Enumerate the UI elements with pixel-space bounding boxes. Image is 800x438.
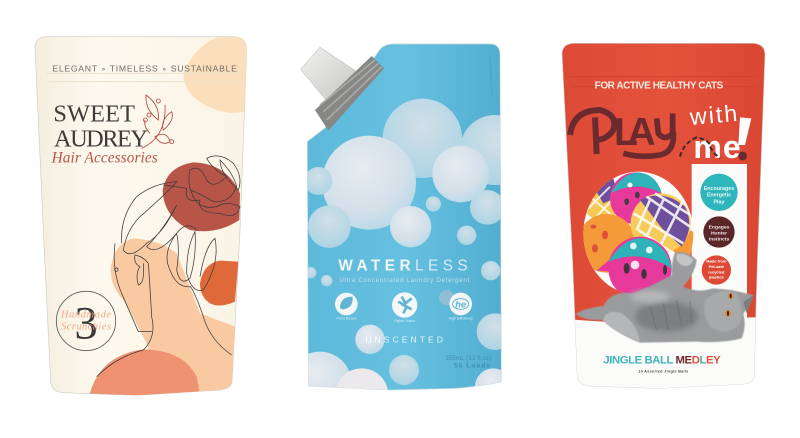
claim: recycled plastics: Pet-safe [709, 264, 725, 269]
claim: hunter instincts: Instincts [709, 237, 729, 243]
net volume [445, 356, 491, 369]
tagline: ELEGANT ∘ TIMELESS ∘ SUSTAINABLE [52, 64, 237, 74]
botanical sprig [142, 95, 174, 148]
pouch body [562, 43, 765, 388]
pouch: Sweet Audrey hair accessories [35, 37, 250, 395]
claim: recycled plastics: recycled [708, 269, 725, 274]
spout cap [301, 47, 384, 131]
claim: hunter instincts: Hunter [711, 231, 727, 237]
ball: yellow-purple lattice [631, 193, 691, 253]
ball: orange orb right [673, 230, 694, 256]
badge: 3 handmade scrunchies: 3 [74, 297, 98, 349]
badge: 3 handmade scrunchies [56, 291, 116, 351]
logo: with me: with [688, 100, 738, 130]
quantity note: 10 Assorted Jingle Balls [638, 370, 688, 374]
ball: teal-pink top [610, 172, 662, 224]
white lower band [575, 317, 756, 388]
logo: with me: me [693, 129, 740, 165]
claim: energetic play: Energetic [707, 193, 731, 199]
badge: 3 handmade scrunchies: Handmade [60, 309, 111, 320]
script subtitle: Hair Accessories [51, 150, 158, 167]
abstract art shapes [47, 37, 250, 395]
icon: fights stains: Fights Stains [394, 319, 415, 323]
pouch body [307, 44, 501, 390]
cat illustration [576, 252, 754, 343]
net volume: 355mL (12 fl.oz) [445, 356, 491, 362]
seal ridge [47, 73, 240, 82]
claim: energetic play: Play [714, 199, 725, 205]
logo: Play [570, 110, 673, 156]
brand name [53, 101, 148, 153]
scent label: UNSCENTED [365, 335, 444, 345]
icon: HE high efficiency: he [455, 299, 466, 309]
claim: recycled plastics [702, 255, 731, 285]
logo: WATERLESS [338, 258, 469, 275]
logo: with me [680, 100, 751, 165]
ball: orange-pink [583, 214, 634, 273]
logo: Play: LA [614, 110, 656, 154]
pouch: Waterless laundry detergent [300, 44, 502, 390]
tagline: FOR ACTIVE HEALTHY CATS [595, 81, 724, 92]
white claims panel [692, 164, 747, 321]
badge: 3 handmade scrunchies: Scrunchies [61, 321, 111, 332]
icon: plant based: Plant Based [336, 316, 356, 320]
claim: hunter instincts [703, 216, 735, 248]
brand name: SWEET [53, 101, 135, 128]
net volume: 55 Loads [454, 362, 490, 369]
claim: energetic play [700, 174, 738, 211]
icon: plant based [335, 293, 358, 320]
ball: teal-pink front [608, 237, 672, 300]
line-art woman [97, 156, 240, 377]
icon: HE high efficiency: High Efficiency [449, 316, 473, 320]
icon: fights stains [392, 292, 417, 323]
brand name: AUDREY [54, 126, 148, 153]
pouch: Play with me cat toy [562, 43, 770, 393]
claim: recycled plastics: plastics [709, 275, 725, 280]
bubbles [308, 55, 502, 390]
toy balls window [583, 172, 694, 294]
ball: purple-yellow back [586, 182, 616, 218]
claim: recycled plastics: Made from [706, 259, 727, 264]
icon: HE high efficiency [449, 293, 473, 320]
claim: hunter instincts: Engages [709, 225, 730, 231]
claim: energetic play: Encourages [704, 186, 734, 192]
product name: JINGLE BALL MEDLEY [603, 354, 721, 366]
fold shading [490, 55, 492, 97]
pouch body [35, 37, 247, 395]
seal ridge [570, 77, 757, 87]
subtitle: Ultra Concentrated Laundry Detergent [339, 277, 470, 284]
